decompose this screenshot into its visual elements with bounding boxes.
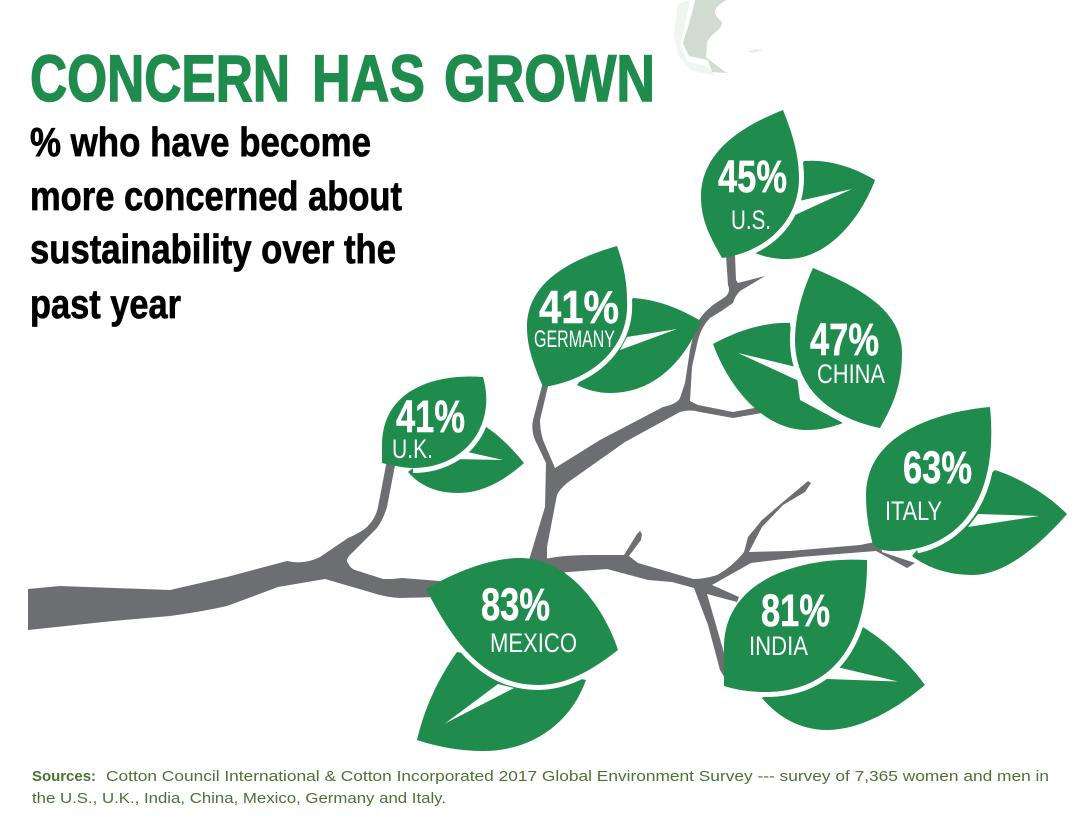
leaf: India 81% bbox=[724, 560, 925, 730]
leaf: Mexico 83%: 83% bbox=[481, 579, 550, 630]
subtitle: more concerned about bbox=[30, 173, 402, 219]
subtitle: past year bbox=[30, 281, 181, 327]
title: GROWN bbox=[444, 41, 655, 115]
sources note: Cotton Council International & Cotton Incorporated 2017 Global Environment Survey --- survey of 7,365 women and men in bbox=[106, 768, 1049, 785]
right limb with twigs bbox=[540, 481, 915, 680]
title: HAS bbox=[312, 41, 425, 115]
leaf: China 47% bbox=[713, 268, 902, 430]
leaf: Mexico 83% bbox=[417, 558, 618, 751]
sources note: Sources: bbox=[32, 768, 96, 785]
leaf: U.K. 41% bbox=[382, 376, 524, 493]
sources note bbox=[32, 768, 1049, 807]
leaf: India 81%: 81% bbox=[761, 585, 830, 636]
leaf: U.S. 45%: 45% bbox=[718, 151, 787, 202]
title: CONCERN bbox=[30, 41, 290, 115]
leaf: Italy 63% bbox=[866, 407, 1067, 575]
leaf: Germany 41%: GERMANY bbox=[534, 326, 615, 353]
map fragment: faded South America tip bbox=[674, 0, 763, 76]
subtitle: % who have become bbox=[30, 119, 371, 165]
leaf: Germany 41% bbox=[527, 246, 701, 393]
leaf: China 47%: 47% bbox=[810, 314, 879, 365]
vertical limb with Germany, U.S. and China stems bbox=[529, 255, 767, 565]
tree branch bbox=[28, 255, 915, 680]
sources note: the U.S., U.K., India, China, Mexico, Germany and Italy. bbox=[32, 790, 446, 807]
leaf: Italy 63%: ITALY bbox=[885, 496, 942, 526]
leaf: U.K. 41%: U.K. bbox=[392, 434, 433, 464]
leaf: Germany 41%: 41% bbox=[539, 281, 619, 333]
leaf: U.S. 45%: U.S. bbox=[731, 205, 771, 235]
title bbox=[30, 41, 655, 115]
leaf: U.K. 41%: 41% bbox=[396, 391, 465, 442]
subtitle: sustainability over the bbox=[30, 226, 396, 272]
trunk with U.K. stem bbox=[28, 460, 440, 630]
leaf: India 81%: INDIA bbox=[749, 631, 808, 661]
leaf: Mexico 83%: MEXICO bbox=[490, 628, 577, 658]
leaf: China 47%: CHINA bbox=[817, 359, 885, 389]
subtitle bbox=[30, 119, 402, 327]
leaf: Italy 63%: 63% bbox=[903, 442, 972, 493]
leaf: U.S. 45% bbox=[701, 110, 875, 259]
